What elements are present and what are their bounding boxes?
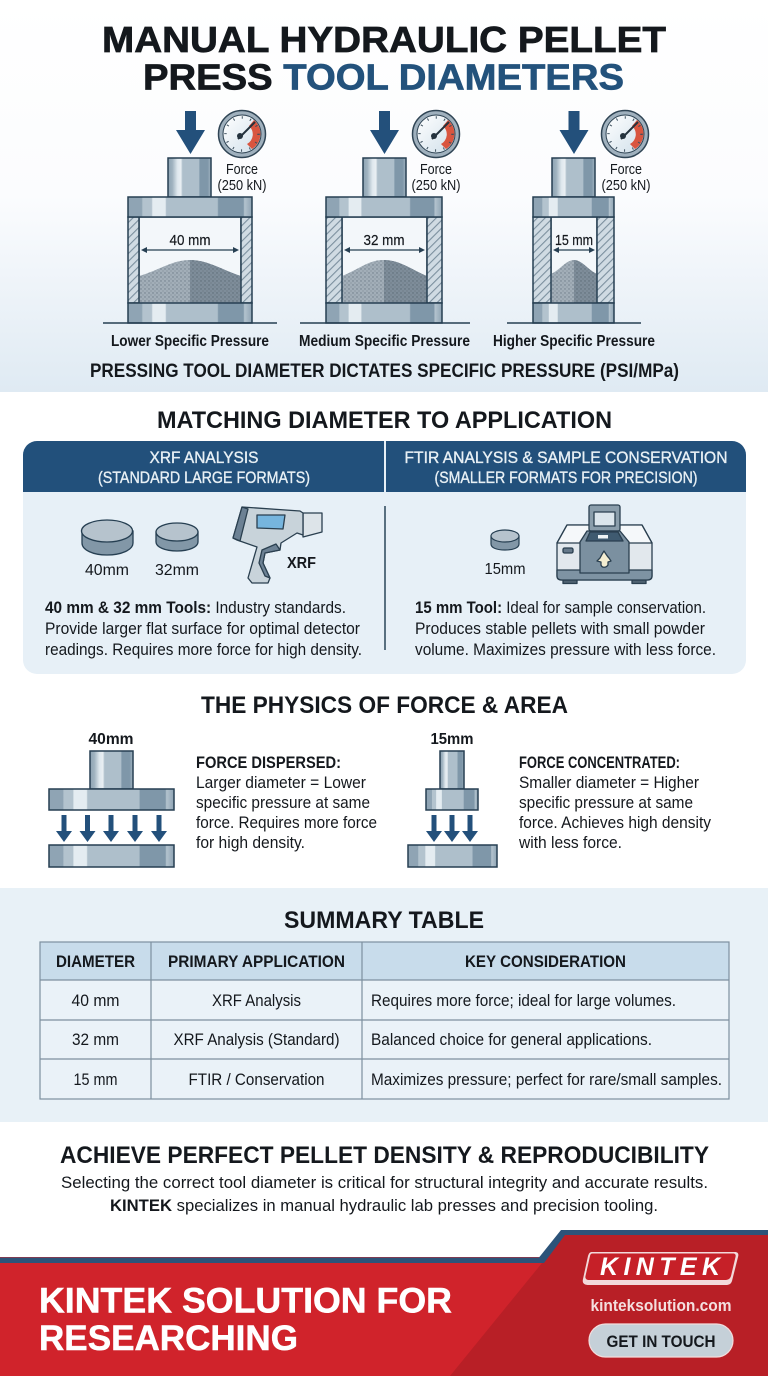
dimension 40 mm: 40 mm [170, 232, 210, 249]
header: FTIR [404, 448, 728, 487]
piston [363, 158, 406, 197]
text: website: kinteksolution.com [590, 1297, 732, 1315]
text: force dispersed: force. Requires more force [196, 814, 377, 832]
heading: physics: THE PHYSICS OF FORCE & AREA [201, 692, 568, 719]
summary table: Balanced choice for general applications. [371, 1031, 652, 1049]
pellet labels: 32mm [155, 562, 199, 579]
summary table: 32 mm [72, 1031, 119, 1049]
footer headline: RESEARCHING [39, 1319, 298, 1358]
label: XRF: XRF [287, 555, 316, 572]
dimension 32 mm: 32 mm [364, 232, 404, 249]
force label: (250 kN) [218, 177, 266, 194]
text: 15 mm tool: volume. Maximizes pressure with less force. [415, 640, 716, 659]
force label: Force [420, 161, 452, 178]
press body [300, 197, 470, 323]
text: call to action: KINTEK specializes in manual hydraulic lab presses and precision tooling. [110, 1196, 658, 1215]
summary table: XRF Analysis [212, 992, 301, 1010]
text: force dispersed: FORCE DISPERSED: [196, 754, 341, 772]
panel: 32 mm press diagram [299, 110, 470, 350]
text: 40 and 32 mm tools: 40 mm & 32 mm Tools: Industry standards. [45, 598, 346, 617]
force label [412, 161, 460, 194]
press body [103, 197, 277, 323]
button: get in touch: GET IN TOUCH [606, 1332, 716, 1351]
button: get in touch [589, 1324, 733, 1357]
header: FTIR: (SMALLER FORMATS FOR PRECISION) [434, 468, 698, 487]
dimension 15 mm: 15 mm [555, 232, 593, 249]
force label: Force [610, 161, 642, 178]
piston [552, 158, 595, 197]
icon: force arrow [560, 111, 588, 154]
logo: KINTEK: KINTEK [600, 1253, 722, 1281]
text: force concentrated: force. Achieves high density [519, 814, 712, 832]
subheading: specific pressure: PRESSING TOOL DIAMETER DICTATES SPECIFIC PRESSURE (PSI/MPa) [90, 361, 679, 382]
text: force concentrated: FORCE CONCENTRATED: [519, 754, 680, 772]
force arrows [56, 815, 167, 842]
text: force concentrated: specific pressure at same [519, 794, 693, 812]
icon: pressure gauge [602, 110, 648, 158]
label 15mm: 15mm [430, 731, 474, 748]
piston [168, 158, 211, 197]
icon: 32mm pellet [156, 523, 198, 551]
label: higher pressure: Higher Specific Pressure [493, 333, 655, 350]
summary table [40, 942, 729, 1099]
panel header bar [23, 441, 746, 492]
header: XRF [98, 448, 310, 487]
title: MANUAL HYDRAULIC PELLET [102, 19, 666, 60]
header: XRF: (STANDARD LARGE FORMATS) [98, 468, 310, 487]
pellet labels: 40mm [85, 562, 129, 579]
title [102, 19, 666, 98]
text: 15 mm tool: 15 mm Tool: Ideal for sample conservation. [415, 598, 706, 617]
icon: 15mm pellet [491, 530, 519, 550]
icon: FTIR spectrometer [557, 505, 652, 584]
heading: call to action: ACHIEVE PERFECT PELLET DENSITY & REPRODUCIBILITY [60, 1142, 709, 1169]
dimension 40 mm [141, 232, 239, 253]
summary table: DIAMETER [56, 953, 135, 971]
text: force concentrated: Smaller diameter = Higher [519, 774, 699, 792]
text: 40 and 32 mm tools: Provide larger flat surface for optimal detector [45, 619, 360, 638]
force label: (250 kN) [412, 177, 460, 194]
logo: KINTEK [583, 1252, 738, 1285]
text: call to action: Selecting the correct tool diameter is critical for structural integrity and accurate results. [61, 1173, 708, 1192]
panel: application comparison [23, 441, 746, 674]
summary table: PRIMARY APPLICATION [168, 953, 345, 971]
icon: pressure gauge [412, 110, 460, 158]
label: lower pressure: Lower Specific Pressure [111, 333, 269, 350]
summary table: KEY CONSIDERATION [465, 953, 626, 971]
press body [507, 197, 641, 323]
icon: XRF gun [233, 507, 322, 583]
force label: Force [226, 161, 258, 178]
text: force concentrated [518, 754, 712, 852]
footer headline [39, 1282, 452, 1358]
icon: 40mm pellet [82, 520, 133, 555]
icon: pressure gauge [218, 110, 266, 158]
heading: matching diameter: MATCHING DIAMETER TO APPLICATION [157, 407, 612, 434]
summary table: Requires more force; ideal for large volumes. [371, 992, 676, 1010]
text: force dispersed: for high density. [196, 834, 305, 852]
text: 40 and 32 mm tools [45, 598, 362, 659]
force label [602, 161, 650, 194]
panel: summary [0, 888, 768, 1122]
header: XRF: XRF ANALYSIS [150, 448, 258, 467]
panel: 40 mm press diagram [103, 110, 277, 350]
panel: footer [0, 1230, 768, 1376]
icon: force arrow [370, 111, 399, 154]
header: FTIR: FTIR ANALYSIS & SAMPLE CONSERVATION [404, 448, 728, 467]
text: force concentrated: with less force. [518, 834, 622, 852]
text: force dispersed: specific pressure at same [196, 794, 370, 812]
label: medium pressure: Medium Specific Pressure [299, 333, 470, 350]
summary table: Maximizes pressure; perfect for rare/small samples. [371, 1071, 722, 1089]
diagram: force concentrated 15mm [408, 731, 497, 867]
pellet label 15mm: 15mm [484, 561, 526, 578]
summary table: 40 mm [72, 992, 120, 1010]
summary table: 15 mm [74, 1071, 118, 1089]
heading: summary table: SUMMARY TABLE [284, 907, 484, 934]
pellet labels [85, 562, 199, 579]
force label [218, 161, 266, 194]
label 40mm: 40mm [88, 731, 134, 748]
force arrows [426, 815, 478, 842]
top section background [0, 0, 768, 392]
text: force dispersed [196, 754, 377, 852]
text: 15 mm tool [415, 598, 716, 659]
dimension 15 mm [553, 232, 595, 253]
summary table: XRF Analysis (Standard) [174, 1031, 340, 1049]
diagram: force dispersed 40mm [49, 731, 174, 867]
text: call to action [61, 1173, 708, 1215]
panel: 15 mm press diagram [493, 110, 655, 350]
force label: (250 kN) [602, 177, 650, 194]
text: 15 mm tool: Produces stable pellets with small powder [415, 619, 705, 638]
text: force dispersed: Larger diameter = Lower [196, 774, 366, 792]
icon: force arrow [176, 111, 205, 154]
title: PRESS TOOL DIAMETERS [143, 56, 624, 98]
summary table: FTIR / Conservation [188, 1071, 324, 1089]
text: 40 and 32 mm tools: readings. Requires more force for high density. [45, 640, 362, 659]
dimension 32 mm [344, 232, 425, 253]
footer headline: KINTEK SOLUTION FOR [39, 1282, 452, 1320]
